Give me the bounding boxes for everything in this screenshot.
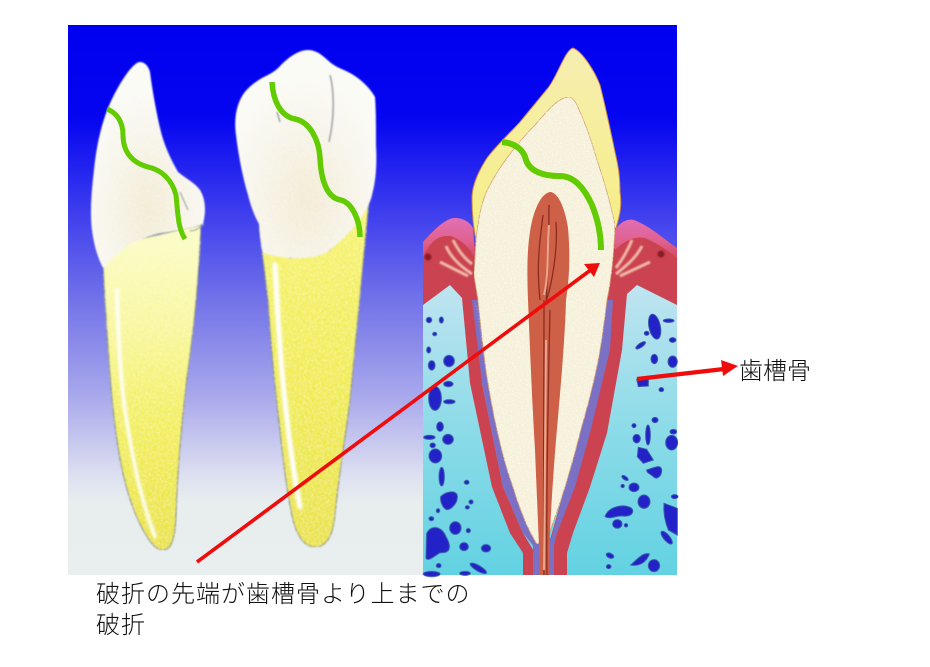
ligament fringe: [478, 305, 535, 535]
highlight on left root: [117, 290, 155, 537]
periodontal ligament: [472, 300, 540, 575]
pink gum margin: [423, 218, 677, 258]
crown crease: [277, 75, 333, 142]
fracture line: centre tooth: [272, 82, 360, 237]
left tooth: side view: [91, 62, 205, 550]
dentine: [474, 97, 615, 544]
root of centre tooth: [259, 200, 369, 547]
gum and periodontal tissue, right: [550, 220, 677, 575]
crown of centre tooth: [235, 50, 376, 258]
fracture line: left tooth: [107, 109, 185, 239]
fracture line: right tooth: [502, 142, 601, 250]
gum and periodontal tissue, left: [423, 218, 535, 575]
caption: fracture description: [96, 581, 471, 638]
arrow: to fracture tip: [197, 263, 600, 562]
pulp vessels: [538, 205, 556, 575]
caption: fracture description: 破折の先端が歯槽骨より上までの: [96, 581, 471, 608]
crown of left tooth: [91, 62, 205, 268]
pulp chamber and canal: [527, 192, 569, 575]
enamel: [472, 48, 621, 240]
bone marrow spaces: [423, 313, 678, 577]
crown crease: [180, 192, 204, 231]
label: alveolar bone: 歯槽骨: [739, 358, 811, 385]
arrow: to alveolar bone label: [637, 360, 738, 379]
gum fibres: [424, 240, 664, 276]
root of left tooth: [103, 225, 201, 550]
apical stem of ligament and canal: [533, 538, 554, 575]
highlight on centre root: [275, 265, 300, 507]
alveolar bone: [423, 280, 677, 575]
pulp light streak: [544, 225, 549, 570]
panel: gradient background: [68, 25, 677, 575]
right tooth: cross-section in bone: [423, 48, 678, 577]
centre tooth: side view: [235, 50, 376, 547]
caption: fracture description: 破折: [96, 612, 146, 638]
